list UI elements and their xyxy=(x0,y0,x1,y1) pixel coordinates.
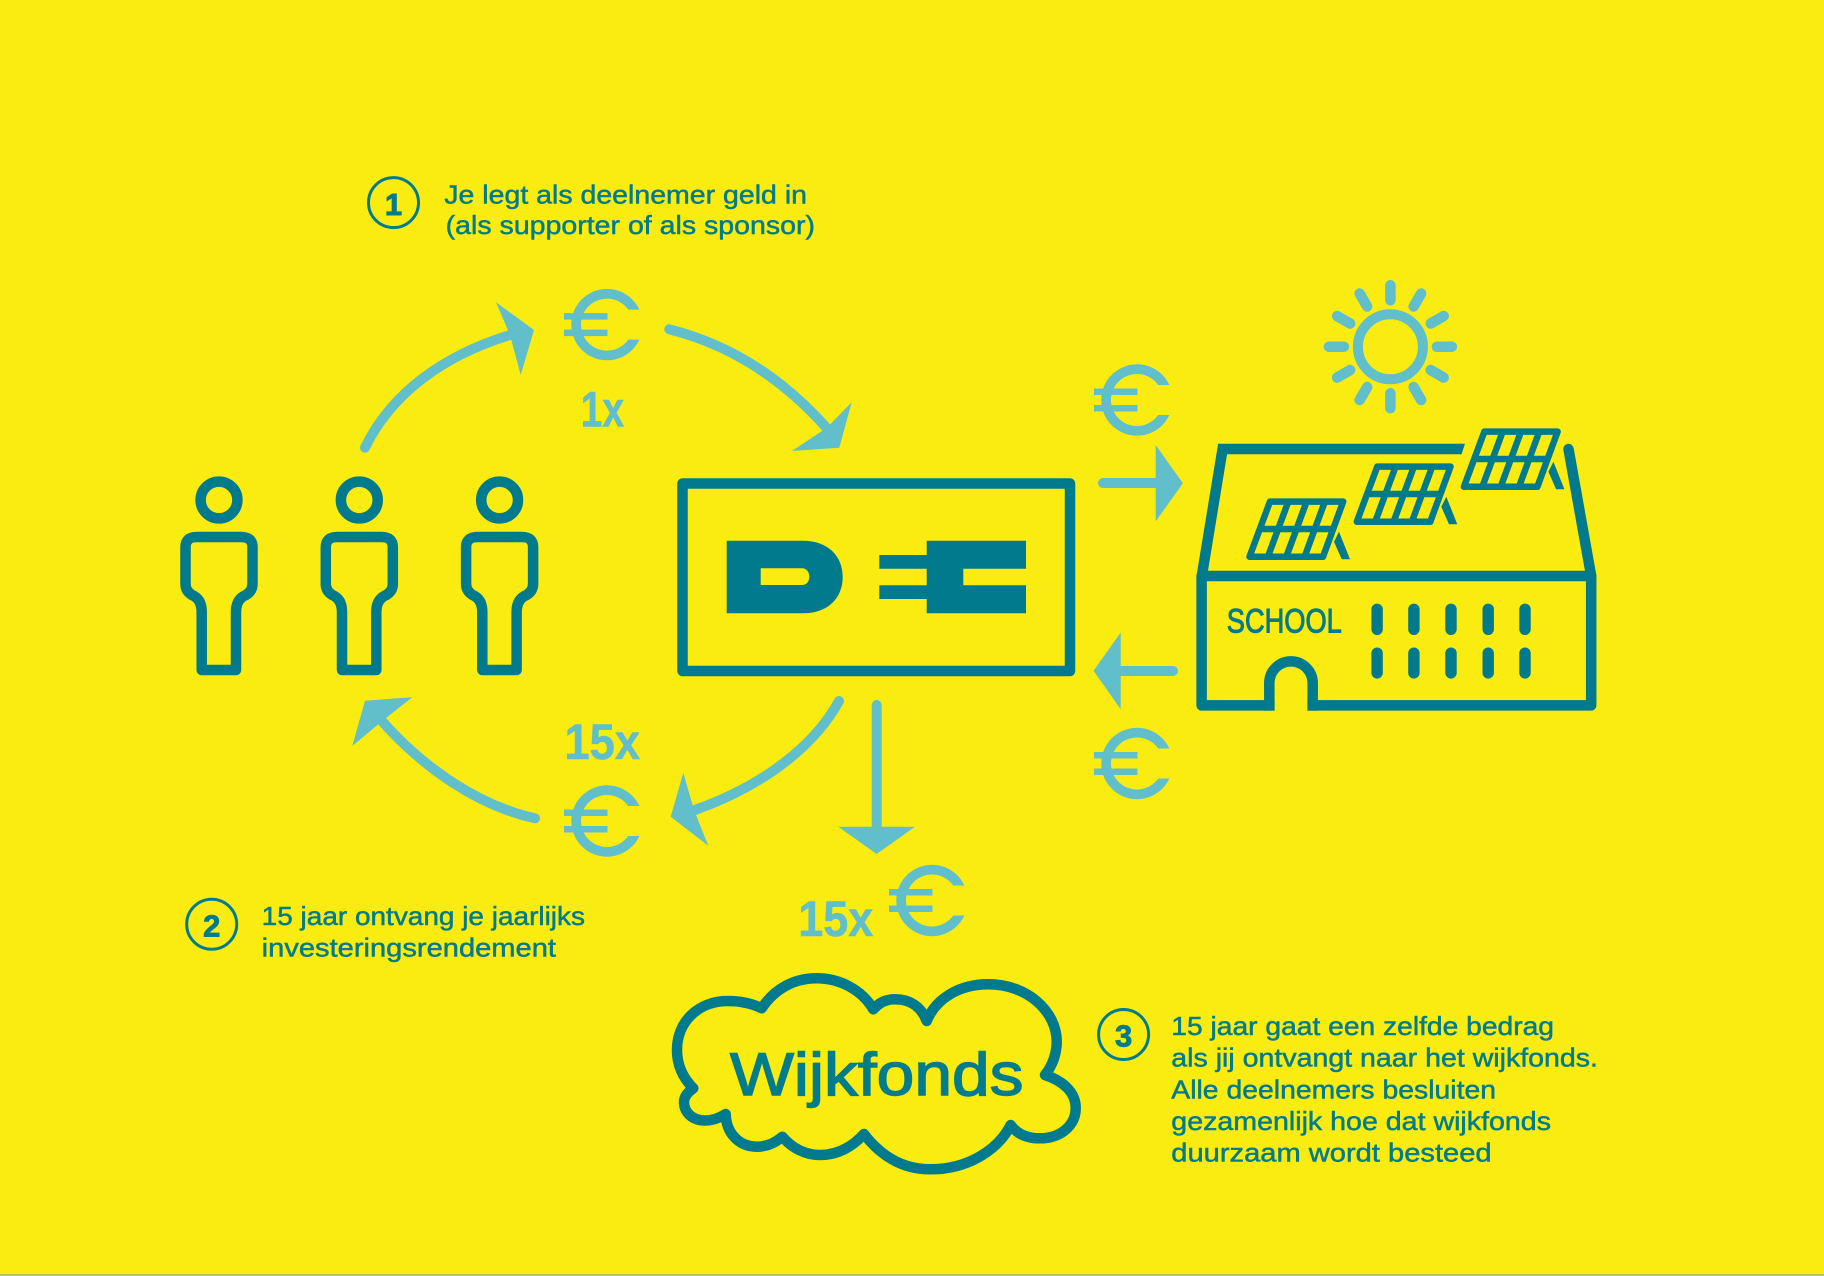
step 1 text xyxy=(444,180,815,240)
number badge 1 xyxy=(368,178,418,228)
school roof xyxy=(1202,444,1591,576)
school windows xyxy=(1371,604,1531,679)
solar panel 3 xyxy=(1464,432,1564,489)
arrow: euro to energy cooperative xyxy=(669,329,852,451)
step 3 text: 15 jaar gaat een zelfde bedrag xyxy=(1171,1011,1554,1041)
number badge 3 xyxy=(1099,1010,1149,1060)
arrow: cooperative down to wijkfonds xyxy=(838,705,915,854)
step 3 text: duurzaam wordt besteed xyxy=(1171,1138,1492,1168)
icon: three people xyxy=(186,482,533,670)
step 2 text: investeringsrendement xyxy=(262,933,557,963)
panel: energy cooperative logo box xyxy=(682,484,1070,671)
step 3 text: gezamenlijk hoe dat wijkfonds xyxy=(1171,1106,1551,1136)
step 3 text xyxy=(1171,1011,1598,1168)
icon: sun xyxy=(1329,285,1452,408)
step 3: numbered explanation xyxy=(1099,1010,1598,1168)
icon: euro (return) xyxy=(564,785,639,857)
school walls and door xyxy=(1202,576,1591,711)
solar panel 1 xyxy=(1250,502,1350,559)
step 2 text: 15 jaar ontvang je jaarlijks xyxy=(262,901,585,931)
cloud: wijkfonds xyxy=(677,978,1076,1169)
icon: euro (to school) xyxy=(1094,364,1169,436)
step 3 text: Alle deelnemers besluiten xyxy=(1171,1074,1496,1104)
school label: SCHOOL xyxy=(1227,603,1342,641)
person 3 xyxy=(466,482,533,670)
step 1 text: (als supporter of als sponsor) xyxy=(446,210,815,240)
number badge 2 xyxy=(187,899,237,949)
logo letter E xyxy=(879,541,1026,613)
label: 15x return: 15x xyxy=(564,714,640,770)
logo letter D xyxy=(727,541,843,613)
number badge 1: 1 xyxy=(385,187,402,222)
icon: euro (1x) xyxy=(564,289,639,360)
step 3 text: als jij ontvangt naar het wijkfonds. xyxy=(1171,1043,1598,1073)
step 1: numbered explanation xyxy=(368,178,815,240)
number badge 2: 2 xyxy=(203,909,220,944)
arrow: cooperative to euro (return) xyxy=(671,701,839,846)
icon: euro (from school) xyxy=(1094,728,1169,799)
step 1 text: Je legt als deelnemer geld in xyxy=(444,180,807,210)
arrow: euro back to people xyxy=(352,697,535,818)
label: 15x wijkfonds: 15x xyxy=(798,891,873,947)
cloud label: Wijkfonds xyxy=(730,1041,1024,1108)
step 2: numbered explanation xyxy=(187,899,585,963)
number badge 3: 3 xyxy=(1115,1019,1132,1054)
arrow: cooperative to school xyxy=(1103,445,1183,521)
solar panel 2 xyxy=(1357,467,1457,524)
icon: euro (wijkfonds) xyxy=(889,865,964,936)
person 2 xyxy=(326,482,393,670)
label: 1x: 1x xyxy=(581,382,624,438)
icon: school building with solar panels xyxy=(1202,432,1591,711)
person 1 xyxy=(186,482,252,670)
step 2 text xyxy=(262,901,585,963)
arrow: school to cooperative xyxy=(1094,632,1173,709)
arrow: people to euro xyxy=(365,302,534,448)
